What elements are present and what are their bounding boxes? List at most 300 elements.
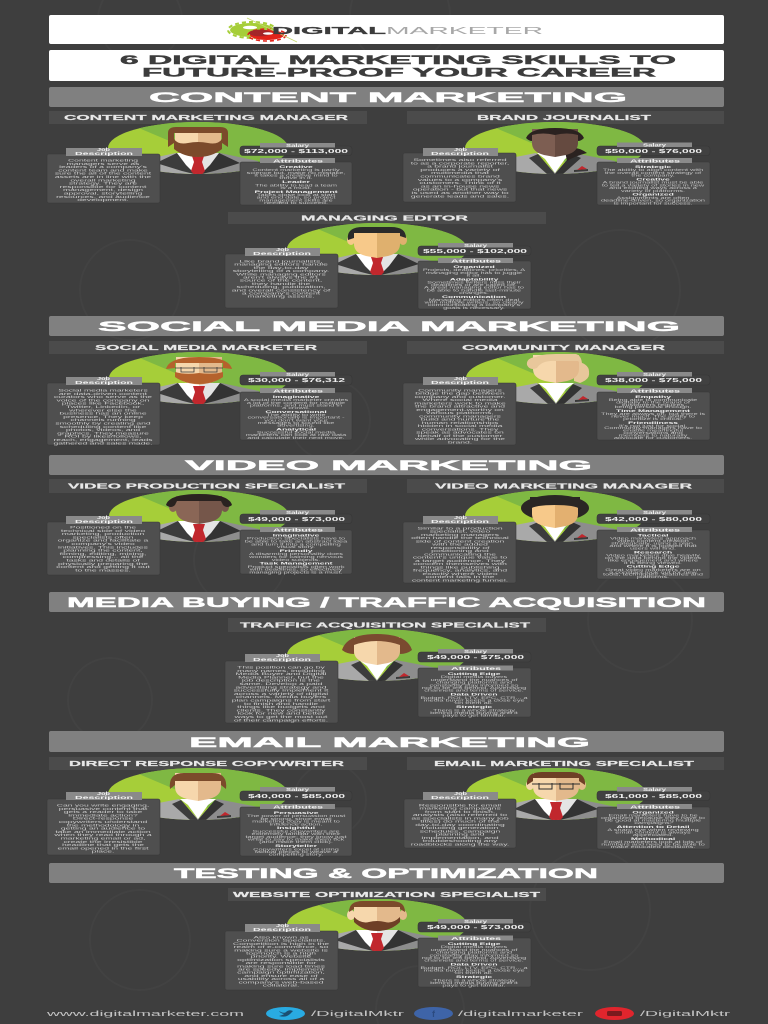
job description: content's unique value to [413,556,508,560]
job description: responsible for content [60,185,147,189]
attributes: influence action. [269,823,323,826]
attributes: Attributes [273,388,324,394]
attributes: Attributes [630,388,681,394]
attributes: variety of platforms. [621,190,686,193]
salary: $49,000 - $73,000 [427,925,524,931]
job title [407,479,724,493]
logo wordmark [272,26,543,37]
card: video production specialist [47,479,367,575]
attributes [418,936,531,988]
job description: place. [92,850,115,854]
attributes: like engagement and where [608,559,698,562]
attributes: The ability to write [266,414,326,417]
job description: Media Buyer and Digital [236,672,327,676]
job description: and ensure ease of [244,974,318,978]
attributes: Managing editors often deal [429,299,519,302]
job description: making sure load times [237,964,326,968]
job description: source of the content, [240,279,322,283]
job description: getting an audience to [61,827,146,831]
attributes: compelling story. [269,853,324,857]
section heading: social media marketing: SOCIAL MEDIA MARKETING [98,318,680,334]
job description: company and customer. [415,395,506,399]
attributes: what to say to make them tick [246,838,345,842]
attributes: Projects, deadlines, priorities. A [423,269,525,272]
job description [403,147,516,202]
attributes: marketers can look at raw data [246,434,347,437]
job description: Conversion Specialists. [236,939,326,943]
job description: speak as advocates on [416,431,504,435]
job title [228,212,546,224]
attributes: Data Driven [450,963,498,967]
attributes: understand the nuances of [431,949,518,952]
job description: various platforms, [426,411,494,415]
job description: company's video [71,542,135,546]
attributes: Sometimes writers miss their [427,281,521,285]
job description: headline that gets the [62,843,144,847]
job description: filming, editing, mixing, [60,552,147,556]
job title: DIRECT RESPONSE COPYWRITER [69,759,346,768]
job description: content falls in the [425,575,495,579]
job description: advertising strategy and [236,685,327,689]
job description: content team and make [58,168,148,173]
attributes: enable meaningful [623,429,683,433]
job description [403,376,516,445]
attributes: Production Specialists have to [247,537,345,541]
job title [49,479,367,493]
attributes: a constant look out for new [609,571,698,574]
attributes: needed to succeed. [264,202,329,205]
job description [225,653,338,723]
job description: often handle the technical [411,536,510,540]
attributes: Attributes [273,158,324,164]
job description: to as a corporate reporter, [411,161,509,165]
job description: frequency, analytics, and [413,569,507,573]
section heading: testing and optimization: TESTING & OPTIMIZATION [174,865,598,881]
attributes: be strong, since email [260,818,332,821]
illustration: bearded man [108,111,298,181]
job description: aren't always the #1 [243,276,319,280]
attributes: campaigns. [634,822,672,825]
job description: planning and [435,833,485,837]
job description: concern themselves with [413,562,507,566]
job description [225,247,338,308]
job description: management, design [63,188,143,192]
attributes: The ability to lead a team [255,184,337,187]
job description: organize and facilitate a [58,539,149,543]
illustration: woman with dark bob [465,479,655,549]
job description: brand. [448,441,472,445]
section heading: email marketing [49,731,724,752]
card: video marketing manager [403,479,724,583]
job description: photos, videos, and [66,428,141,432]
attributes: behind media buying and it [430,712,518,715]
title: 6 DIGITAL MARKETING SKILLS TO [120,55,676,67]
attributes: Methodical [631,837,675,841]
job description: bridge the gap between [415,392,505,396]
attributes: deadlines or are called off. [431,284,518,287]
job title: CONTENT MARKETING MANAGER [64,113,350,122]
attributes: Assignments are often [617,197,689,200]
attributes: being personal enough. [615,406,692,409]
job description: gathered and sales made. [53,441,153,445]
job description: curators who serve as the [54,395,152,399]
job description: plan campaigns from start [232,699,330,703]
illustration: curly haired man [109,479,299,549]
job description: as specialists in many job [411,817,509,821]
job description: compressing... all the [63,555,144,559]
job description: things like budgets and [237,705,325,709]
job description: Description [75,795,133,801]
job description: when they read through a [53,833,152,837]
salary: Salary [643,510,667,516]
footer [44,1007,732,1020]
salary: $50,000 - $76,000 [605,149,702,155]
attributes: advertising. [277,424,315,428]
job description: presence. They keep [63,415,143,419]
attributes: platforms, and must stand in [250,404,342,408]
attributes: Attributes [273,804,324,810]
job description: Job [454,376,467,382]
job description: the day-to-day [254,266,309,270]
title [49,50,724,81]
attributes: strategically, using a plan, [611,542,695,546]
job description: Like brand journalists, [239,260,323,264]
attributes: Friendliness [628,421,678,425]
salary [418,919,531,932]
job description: Description [75,380,133,386]
job description: generate leads and sales. [411,194,509,198]
attributes: is a must. [280,187,312,190]
salary: $49,000 - $75,000 [427,655,524,661]
job description: Job [97,147,110,153]
job description: responsibility of [430,546,490,550]
job title: SOCIAL MEDIA MARKETER [95,343,319,352]
job description: leaders of a company's [59,165,148,169]
job description: Job [276,923,289,929]
card: website optimization specialist [225,888,546,990]
job title [49,341,367,354]
job description: analysts (also referred to [413,813,508,817]
job description: Description [431,151,489,157]
attributes [597,804,710,849]
section heading: testing and optimization [49,863,724,883]
attributes: digitally to the brand of [616,401,690,405]
job description: a company's content [242,292,320,296]
job description: Job [454,791,467,797]
job description: a brand journalist [427,165,493,169]
job description: immediate action? [68,813,138,818]
attributes: Time Management [616,409,691,413]
attributes: is important for success. [613,202,693,205]
attributes: Attributes [451,258,502,264]
attributes: goals is necessary. [443,307,505,310]
attributes: not to be left behind. Advertising [422,957,526,960]
job description: approval, storytelling [64,192,143,196]
salary: Salary [464,919,488,925]
job title: COMMUNITY MANAGER [462,343,667,352]
attributes: Research [634,551,672,554]
salary [240,510,352,524]
attributes: on them all. [455,702,494,705]
salary: Salary [643,142,667,148]
job description: engagement-worthy on [416,408,504,412]
attributes: Attributes [451,666,502,672]
job description: while advocating for the [414,437,505,441]
salary: $49,000 - $73,000 [248,517,345,523]
attributes: Budget, ROI, LTV, EPC, CTR... a [420,697,529,700]
card: email marketing specialist [404,757,724,849]
salary [597,372,710,385]
salary: Salary [464,243,488,249]
job description: values to a company's [418,178,503,182]
job description: specialist, video [430,530,491,534]
attributes [240,804,352,857]
job description: many names, including [237,669,325,673]
attributes: behind media buying and it [430,982,518,985]
attributes: Community managers have to [604,427,702,430]
job description: This position can go by [237,666,326,670]
job description: Job [97,376,110,382]
job description: create the irresistible [63,840,143,844]
job description: While managing editors [236,272,327,276]
icon: twitter [266,1007,305,1020]
attributes: on the data behind the videos [605,557,701,560]
attributes: appreciated. [633,834,674,837]
logo wordmark: DIGITAL [272,26,386,37]
job description [404,791,516,848]
attributes: constantly stay informed so [430,954,518,957]
attributes: on them all. [455,972,494,975]
job description: gets a reader to take [64,810,143,814]
attributes: video content creation [617,540,689,543]
attributes: Takes close look at start [257,194,336,197]
job title: MANAGING EDITOR [301,214,470,222]
attributes: not to be left behind. Advertising [422,687,526,690]
job description: Twitter, LinkedIn, or [66,405,141,409]
job description: strategy. They are [69,182,138,186]
salary: Salary [464,649,488,655]
section heading: media buying / traffic acquisition: MEDIA BUYING / TRAFFIC ACQUISITION [67,594,706,610]
attributes: Successful social media [257,431,336,435]
section heading: content marketing: CONTENT MARKETING [149,89,627,105]
facebook handle: /digitalmarketer [458,1011,585,1018]
job description: marketers work to make [414,402,506,406]
attributes: channels and terms of service. [424,689,524,693]
job description: Content marketing [68,159,138,163]
icon: facebook: f [432,1009,436,1019]
attributes: pays to get familiar. [442,714,506,718]
attributes: and exciting ways across a [609,187,698,190]
attributes: changing platforms and [436,951,512,955]
job description: overall marketing [70,178,136,182]
job title [407,111,724,124]
attributes: Conversational [265,410,327,414]
attributes: never much. The ability to [611,415,695,419]
attributes: management skills are [259,199,333,202]
illustration: dark haired man [287,212,477,282]
job description: assets are in line with the [55,175,151,179]
attributes: Attributes [630,804,681,810]
attributes: conversations and [623,432,683,435]
job description: scheduling, publication, [236,285,326,289]
attributes: media buyer keeps a close eye [423,699,525,703]
illustration: man with glasses [466,757,656,827]
attributes: The power of persuasion must [247,815,346,818]
attributes: Digital media buyers [441,946,507,949]
attributes: Persuasive [274,811,319,815]
attributes: and calculate their next move. [247,437,345,440]
attributes: be good at mastering multiple [605,819,701,823]
attributes: and turn it into a compelling [251,543,341,546]
job description: positioning and [431,549,489,553]
attributes [240,388,352,440]
attributes: members to naturally [619,434,687,438]
attributes: a lot of the content for multiple [247,402,345,405]
job description: Description [431,519,489,525]
job description: Community managers [418,389,503,393]
job description: same. Develop a paid [240,682,323,686]
card: direct response copywriter [47,757,367,857]
job description: with the added [431,543,488,547]
job description [225,923,338,990]
salary: Salary [286,372,310,378]
job description: schedules, campaign [420,830,501,834]
youtube handle: /DigitalMktr [640,1011,732,1018]
job description [47,376,160,445]
salary: $38,000 - $75,000 [605,378,702,384]
attributes: Cutting Edge [448,672,501,676]
job description: specialists often [73,535,134,540]
job description: implementation, and [421,836,499,840]
attributes: deadline-driven, so organization [601,199,705,203]
logo wordmark: MARKETER [386,26,543,37]
attributes: the company. [631,174,675,178]
salary [597,510,710,524]
icon: youtube [595,1007,634,1020]
attributes [240,158,352,205]
card: traffic acquisition specialist [225,618,546,723]
job description: physically preparing the [58,562,148,566]
attributes: Empathy [635,395,671,399]
attributes: Project Management [254,190,339,194]
job title [228,888,546,901]
attributes: Great video marketers are on [605,569,701,572]
attributes [597,527,710,579]
job title [49,757,367,770]
job description: graphics. They measure [57,431,149,436]
job description: clients. They constantly [237,708,326,713]
job description: marketing, production [62,532,145,536]
job description: behalf of the customer [418,434,503,438]
attributes: Content marketing is partly [252,169,340,172]
salary [418,649,531,662]
job description: roadblocks along the way. [411,843,509,847]
card: brand journalist [403,111,724,205]
section heading: media buying / traffic acquisition [49,592,724,612]
job description: the brand attractive and [415,405,505,409]
job description: optimization specialists [237,958,326,962]
job description: Direct-response [73,817,134,821]
attributes: Tactical [637,534,669,538]
salary [418,243,531,256]
job description: day-to-day coordinating [415,823,505,827]
job description: build and nurture the [421,418,500,422]
job description: making sure a website is [234,948,329,952]
job description: marketing assets. [247,295,315,299]
attributes: the overall content strategy of [605,172,702,175]
job description: scheduling content like [60,425,147,429]
attributes: Adaptability [450,277,499,281]
job description: Job [276,247,289,253]
job description: Description [431,380,489,386]
attributes: you don't want your [264,419,328,422]
job description: communicating the [424,553,496,557]
job description: business has an online [59,412,147,416]
attributes: advocate for customers. [614,437,693,440]
attributes: wonders for calming nervous [248,556,343,559]
salary: $30,000 - $76,312 [248,378,345,384]
icon: facebook [414,1007,453,1020]
attributes: platforms. [637,576,670,579]
attributes: It's not just for social. [619,425,688,428]
job description: email opened in the first [58,846,149,851]
job title [228,618,546,632]
job description: look for new and better [237,712,326,716]
attributes: changes. [459,292,489,295]
attributes: Attention to Detail [616,825,690,829]
attributes: customers requires [622,404,684,407]
attributes: pays to get familiar. [442,984,506,988]
attributes [597,388,710,440]
attributes: Organized [453,265,495,269]
attributes: changing platforms and [436,681,512,685]
job description: persuasive content that [59,807,147,811]
job description: exactly where video [422,572,498,576]
attributes: Organized [632,193,674,197]
section heading: content marketing [49,87,724,107]
attributes [597,158,710,205]
logo bar [49,15,724,44]
job title: VIDEO MARKETING MANAGER [435,482,694,490]
job description: Also known as [253,936,309,940]
attributes: it is being viewed. [624,562,682,565]
job description: places like Facebook, [62,402,144,406]
job description: side of content creation [416,540,505,544]
job description: voice of the company on [57,398,150,403]
attributes: A great managing editor has to [424,286,524,290]
attributes: Imaginative [273,395,320,399]
job description: from start to finish, [425,810,495,814]
attributes: Attributes [630,527,681,533]
attributes: factual pieces to weave a [255,851,338,854]
attributes: Product specialists often work [247,566,345,569]
job description: titles) do much of the [420,820,500,824]
job description: Positioned on the [70,526,136,530]
section heading: video marketing: VIDEO MARKETING [185,457,592,473]
job description: hidden in social media [418,424,503,428]
salary: $55,000 - $102,000 [423,249,527,255]
job title [407,341,724,354]
attributes: Cutting Edge [627,565,680,569]
salary: $72,000 - $113,000 [244,149,348,155]
section heading: social media marketing [49,316,724,336]
attributes: it takes a creative mind to [254,174,338,178]
salary: Salary [643,787,667,793]
job description: Competition is high in the [233,942,329,946]
salary: $40,000 - $85,000 [248,794,345,800]
job description: planning the content, [63,549,143,553]
job description [403,515,516,583]
